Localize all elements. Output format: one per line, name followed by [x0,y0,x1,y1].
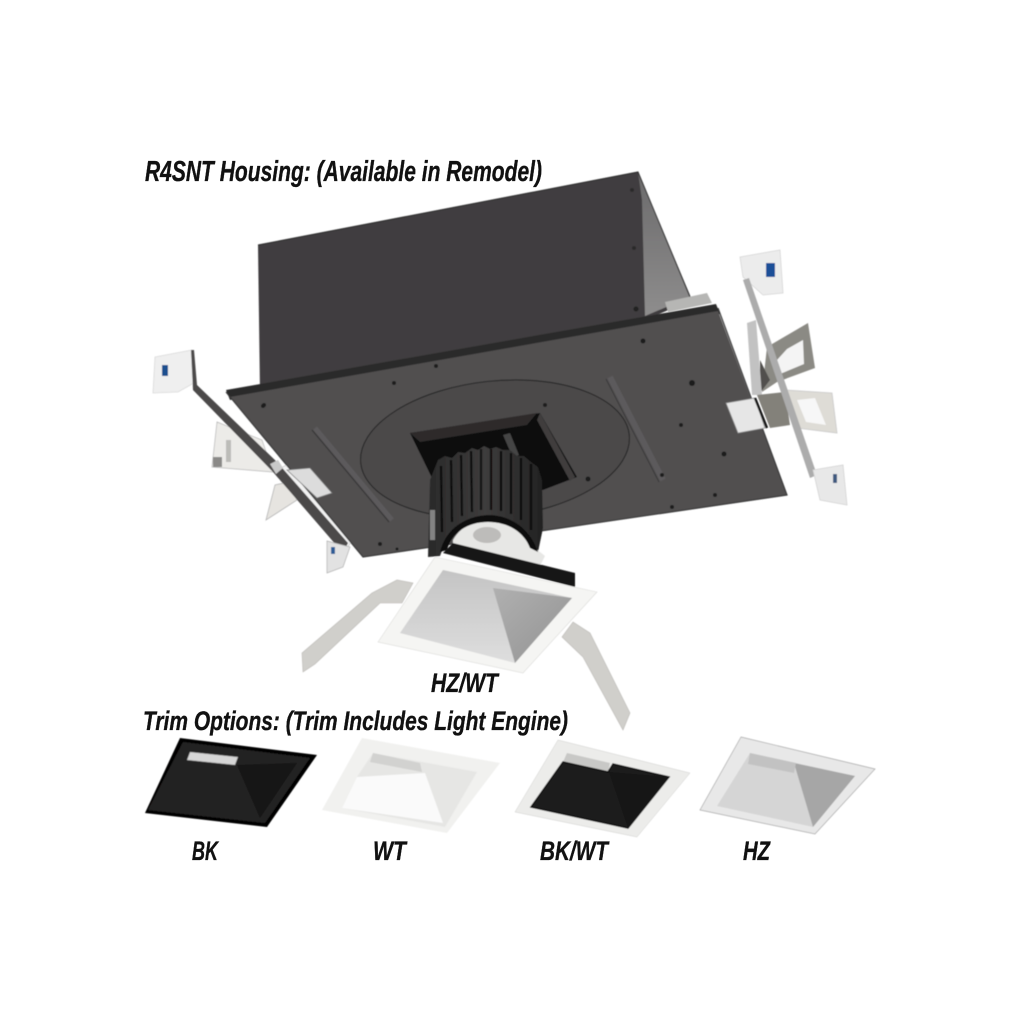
left tab [287,468,332,498]
label: BK: BK [192,836,220,866]
label: WT: WT [373,836,408,866]
title: housing heading: R4SNT Housing: (Available in Remodel) [145,156,542,188]
heading: trim options: Trim Options: (Trim Includes Light Engine) [143,706,568,736]
right mounting bracket [740,250,847,505]
trim: black with white flange [515,740,690,837]
plate ribs [315,428,392,520]
trim: haze [700,737,875,834]
mounting plate [226,304,787,557]
right tab [726,398,765,433]
housing assembly illustration [153,172,847,730]
circular plate cutout [354,367,636,531]
left mounting bracket [153,350,352,573]
heat sink light engine [428,446,545,566]
housing box [258,172,712,392]
trim: black [145,738,317,827]
label: HZ: HZ [743,836,771,866]
lens [453,518,545,566]
label: HZ/WT: HZ/WT [431,668,500,698]
square opening [410,413,577,490]
trim: white [322,738,500,833]
HZ/WT trim [378,543,597,673]
spring clips [302,580,630,730]
label: BK/WT: BK/WT [540,836,610,866]
